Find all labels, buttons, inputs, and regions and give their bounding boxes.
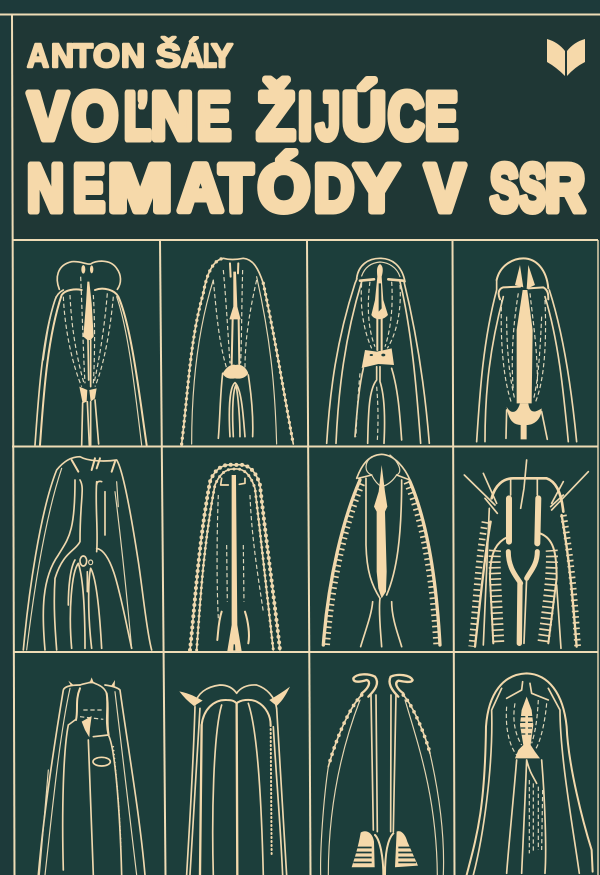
title line 2: E bbox=[73, 151, 105, 226]
panel: nematode row 1 column 1 bbox=[35, 261, 147, 445]
title line 1: C bbox=[388, 79, 424, 154]
author name: Y bbox=[211, 37, 233, 74]
panel: nematode row 1 column 2 bbox=[182, 258, 293, 444]
panel: nematode row 2 column 3 bbox=[323, 454, 440, 647]
panel: nematode row 2 column 4 bbox=[464, 460, 588, 648]
title line 2: Ó bbox=[258, 151, 310, 226]
author name: N bbox=[51, 37, 74, 74]
title line 1: Ž bbox=[257, 79, 295, 154]
panel: nematode row 2 column 1 bbox=[23, 457, 152, 650]
title line 1: I bbox=[298, 79, 312, 154]
title line 1: E bbox=[425, 79, 458, 154]
panel: nematode row 3 column 2 bbox=[179, 685, 290, 875]
title line 1: O bbox=[72, 79, 118, 154]
author name: Š bbox=[156, 36, 181, 74]
title line 2: D bbox=[314, 151, 354, 226]
author name: A bbox=[27, 37, 49, 74]
author name: T bbox=[73, 37, 93, 74]
title line 1: N bbox=[151, 79, 193, 154]
title line 2: R bbox=[545, 151, 585, 226]
author name: O bbox=[93, 37, 120, 74]
title line 2: A bbox=[178, 151, 223, 226]
title line 1: J bbox=[316, 79, 340, 154]
icon: publisher book logo bbox=[547, 39, 585, 76]
title line 2: S bbox=[490, 151, 519, 226]
title line 1: Ú bbox=[342, 79, 386, 154]
author name: Á bbox=[181, 37, 204, 74]
title line 2: M bbox=[108, 151, 172, 226]
panel: nematode row 3 column 4 bbox=[467, 673, 593, 875]
title line 1: E bbox=[197, 79, 231, 154]
title line 2: T bbox=[219, 151, 253, 226]
title line 2: Y bbox=[354, 151, 399, 226]
panel: nematode row 1 column 3 bbox=[327, 258, 429, 443]
panel: nematode row 3 column 1 bbox=[38, 677, 145, 875]
title line 1: V bbox=[28, 79, 68, 154]
author name: N bbox=[121, 37, 145, 74]
title line 1: Ľ bbox=[124, 79, 151, 154]
panel: nematode row 3 column 3 bbox=[321, 674, 444, 875]
author name: L bbox=[203, 37, 217, 74]
title line 2: S bbox=[519, 151, 546, 226]
panel: nematode row 2 column 2 bbox=[190, 465, 280, 651]
title line 2: V bbox=[425, 151, 465, 226]
title line 2: N bbox=[27, 151, 64, 226]
panel: nematode row 1 column 4 bbox=[477, 258, 577, 442]
